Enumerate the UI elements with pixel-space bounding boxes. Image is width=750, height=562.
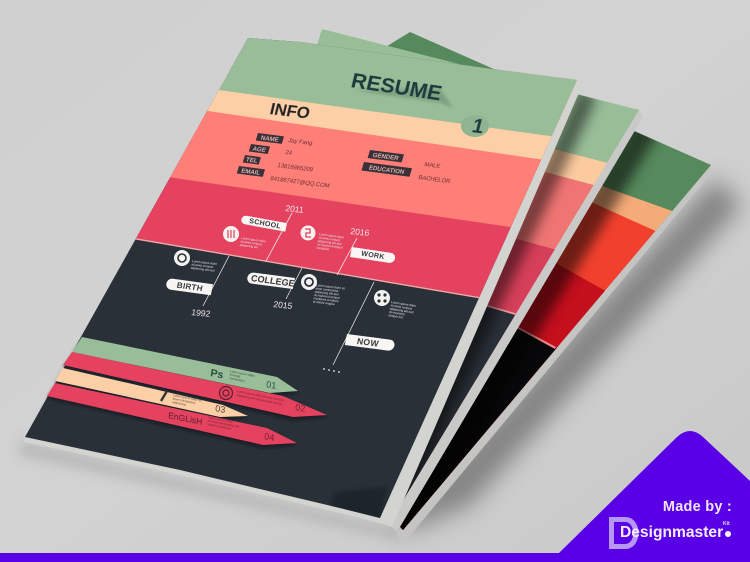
now description: sit amet consect: [390, 303, 413, 311]
pill: SCHOOL: SCHOOL: [248, 217, 282, 231]
work description: incididunt ut labore: [313, 296, 339, 303]
number 03: 03: [215, 403, 226, 415]
label: EMAIL: EMAIL: [240, 168, 261, 177]
text: Kit: Kit: [723, 521, 730, 527]
school description: Lorem ipsum dolor: [241, 236, 266, 243]
work description: do eiusmod tempor: [314, 293, 340, 300]
now description: tempor inci: [388, 313, 404, 320]
now description: adipiscing elit sed: [389, 307, 414, 314]
work description: Lorem ipsum dolor sit: [316, 283, 345, 290]
label: GENDER: GENDER: [372, 152, 400, 162]
band: dark: [25, 38, 577, 518]
page number 1: 1: [470, 115, 486, 138]
college description: do eiusmod tempor: [317, 242, 343, 250]
arrow 04 text: Lorem ipsum dolor: [208, 415, 233, 424]
info block: right labels and values: [361, 150, 452, 185]
text: Made by: Made by :: [663, 499, 732, 515]
arrow 01: green: [72, 337, 298, 393]
arrow 02 text: adipiscing elit sed eiusmod tempor: [237, 393, 283, 406]
booklet 2 (middle): [317, 29, 643, 532]
college description: Lorem ipsum dolor: [319, 232, 344, 239]
school description: sit amet consect: [240, 239, 263, 246]
college description: incididunt: [316, 246, 330, 251]
birth description: sit amet consect: [191, 262, 214, 269]
label: English: EnGLisH: [168, 410, 203, 427]
arrow 01 text: Lorem ipsum dolor: [230, 369, 255, 378]
value: gender: MALE: [423, 162, 441, 170]
icon: now: [374, 290, 390, 306]
birth description: adipiscing elit sed: [190, 266, 215, 273]
arrow 04: crimson: [47, 383, 297, 445]
year 2016: 2016: [350, 226, 370, 238]
value: email: 841867427@QQ.COM: [269, 176, 330, 190]
work description: adipiscing elit sed: [314, 290, 339, 296]
front cover bands: [25, 38, 577, 518]
pill: BIRTH: [165, 278, 213, 295]
icon: birth: [174, 250, 190, 266]
logo dot: [725, 531, 731, 537]
icon: college: [300, 226, 316, 240]
booklet 2 colour bands: [317, 29, 639, 500]
label: AGE: AGE: [252, 146, 267, 154]
now description: Lorem ipsum dolor: [391, 300, 416, 308]
arrow 01 text: sit amet: [230, 373, 241, 379]
logo: D mark: [609, 517, 638, 549]
badge shape: [0, 431, 750, 562]
icon: work: [301, 274, 317, 290]
arrow 04 text: adipiscing elit sed: [207, 422, 231, 431]
title: RESUME: RESUME: [349, 68, 444, 105]
value: education: BACHELOR: [417, 175, 452, 185]
booklet 1 (front): [24, 38, 578, 526]
pill: COLLEGE: COLLEGE: [250, 273, 296, 289]
arrow 02 text: Lorem ipsum dolor sit amet consect: [237, 389, 284, 402]
work description: et dolore magna: [313, 300, 335, 306]
band: salmon: [170, 90, 572, 227]
label: EDUCATION: EDUCATION: [368, 165, 406, 176]
fold at bottom corner: [330, 486, 388, 520]
booklet 3 colour bands: [388, 32, 711, 530]
label: Ps: Ps: [210, 367, 224, 382]
work description: amet consectetur: [315, 286, 339, 293]
arrow 04 text: sit amet consectetur elit: [208, 419, 239, 429]
timeline stems: [203, 213, 374, 365]
skill arrows: [47, 337, 327, 448]
pill: NOW: NOW: [356, 336, 380, 349]
icon: school: [223, 226, 239, 242]
booklet 2 page edge: [388, 108, 643, 532]
value: name: Jay Fang: [287, 138, 313, 147]
icon: pen: [161, 391, 167, 401]
year 2011: 2011: [285, 203, 305, 215]
arrow 02: crimson: [63, 352, 327, 417]
icon: camera: [220, 386, 232, 400]
info block: left labels and values: [237, 133, 330, 190]
value: age: 24: [284, 150, 293, 157]
pill: SCHOOL: [241, 215, 287, 232]
text: Designmaster: Designmaster: [620, 524, 723, 541]
college description: adipiscing elit sed: [317, 239, 342, 246]
stack shadow: [20, 178, 742, 540]
arrow 01 text: consectetur: [229, 376, 245, 383]
resume curl shadow: [352, 88, 453, 108]
pill: NOW: [345, 334, 396, 351]
arrow 03 text: amet consectetur: [173, 397, 196, 405]
birth description: Lorem ipsum dolor: [192, 259, 217, 266]
band: peach: [207, 70, 577, 160]
arrow 03 text: Lorem ipsum dolor sit: [173, 393, 202, 403]
pill: WORK: WORK: [361, 250, 386, 261]
pill: BIRTH: BIRTH: [176, 281, 204, 293]
arrow 03: peach: [55, 368, 248, 417]
number 01: 01: [266, 379, 277, 391]
now description: do eiusmod: [389, 310, 405, 316]
booklet 3 page edge: [396, 165, 714, 544]
number 02: 02: [295, 402, 306, 414]
label: TEL: TEL: [245, 156, 259, 165]
number 04: 04: [264, 431, 275, 443]
booklet 3 (back): [388, 32, 713, 535]
value: telephone: 13816865209: [276, 163, 314, 174]
year 1992: 1992: [191, 307, 211, 319]
school description: adipiscing elit: [239, 243, 258, 249]
band: green: [219, 38, 577, 136]
year 2015: 2015: [273, 299, 293, 311]
dots: ongoing: [323, 368, 340, 373]
pill: WORK: [350, 247, 396, 264]
arrow 03 text: adipiscing: [172, 400, 186, 407]
label: NAME: NAME: [260, 135, 279, 144]
heading: INFO: INFO: [268, 99, 312, 123]
tab: page number: [461, 115, 489, 137]
badge: made by: [0, 431, 750, 562]
arrow shadows: [47, 340, 327, 448]
front page edge: [24, 80, 581, 527]
timeline: [165, 203, 416, 373]
band: crimson: [100, 100, 480, 297]
college description: sit amet consect: [318, 235, 341, 242]
